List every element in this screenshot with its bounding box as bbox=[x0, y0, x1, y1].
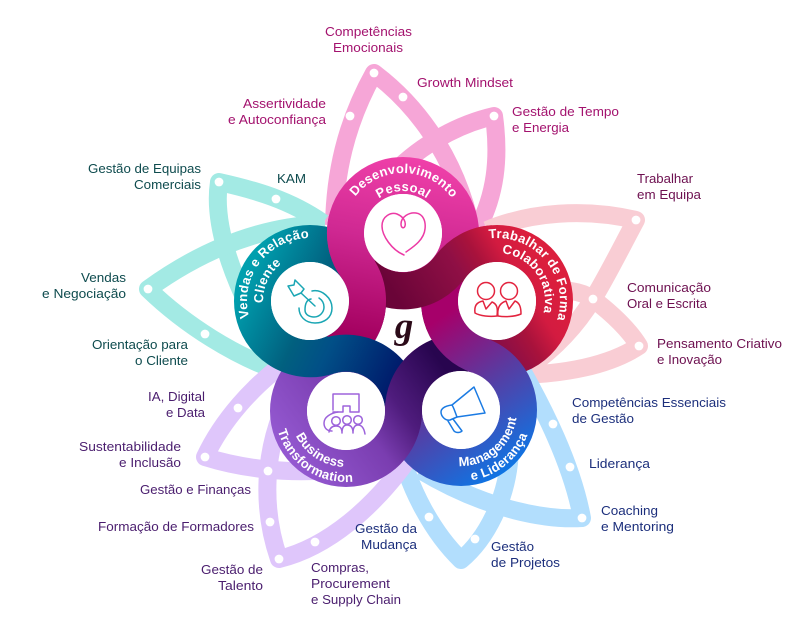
labels: Management e Liderança skills: Liderança bbox=[589, 456, 651, 471]
ring label: Desenvolvimento Pessoal: Desenvolvimento bbox=[349, 164, 456, 196]
labels: Vendas e Relação Cliente skills: o Cliente bbox=[135, 353, 188, 368]
labels: Business Transformation skills: IA, Digital bbox=[148, 389, 205, 404]
labels: Management e Liderança skills: Gestão bbox=[491, 539, 534, 554]
labels: Trabalhar de Forma Colaborativa skills: e Inovação bbox=[657, 352, 722, 367]
ring label: Management e Liderança: Management bbox=[459, 416, 516, 466]
icon: presentation group bbox=[324, 394, 365, 434]
labels: Trabalhar de Forma Colaborativa skills: Trabalhar bbox=[637, 171, 694, 186]
labels: Management e Liderança skills: Gestão da bbox=[355, 521, 418, 536]
labels: Desenvolvimento Pessoal skills: Growth Mindset bbox=[417, 75, 513, 90]
labels: Vendas e Relação Cliente skills: Vendas bbox=[81, 270, 127, 285]
labels: Business Transformation skills bbox=[79, 389, 401, 607]
interlocked rings bbox=[252, 176, 554, 468]
labels: Trabalhar de Forma Colaborativa skills: Pensamento Criativo bbox=[657, 336, 782, 351]
ring label: Business Transformation: Business bbox=[296, 432, 344, 467]
logo g: g bbox=[394, 306, 413, 347]
labels: Vendas e Relação Cliente skills: KAM bbox=[277, 171, 306, 186]
labels: Business Transformation skills: e Inclusão bbox=[119, 455, 181, 470]
labels: Trabalhar de Forma Colaborativa skills bbox=[627, 171, 782, 367]
petals: Vendas e Relação Cliente bbox=[148, 182, 325, 378]
ring label: Management e Liderança: e Liderança bbox=[471, 434, 528, 480]
labels: Vendas e Relação Cliente skills: Gestão de Equipas bbox=[88, 161, 202, 176]
labels: Desenvolvimento Pessoal skills: e Energia bbox=[512, 120, 570, 135]
labels: Desenvolvimento Pessoal skills: e Autoconfiança bbox=[228, 112, 327, 127]
labels: Business Transformation skills: e Data bbox=[166, 405, 206, 420]
labels: Vendas e Relação Cliente skills: Comerciais bbox=[134, 177, 202, 192]
labels: Trabalhar de Forma Colaborativa skills: Oral e Escrita bbox=[627, 296, 708, 311]
labels: Vendas e Relação Cliente skills: Orientação para bbox=[92, 337, 189, 352]
labels: Trabalhar de Forma Colaborativa skills: em Equipa bbox=[637, 187, 702, 202]
skill dots bbox=[144, 69, 643, 563]
labels: Business Transformation skills: Compras, bbox=[311, 560, 369, 575]
labels: Desenvolvimento Pessoal skills: Emocionais bbox=[333, 40, 404, 55]
ring label: Business Transformation: Transformation bbox=[278, 428, 352, 482]
ring label: Trabalhar de Forma Colaborativa: Colaborativa bbox=[503, 245, 554, 313]
labels: Vendas e Relação Cliente skills bbox=[42, 161, 306, 368]
ring label: Trabalhar de Forma Colaborativa: Trabalhar de Forma bbox=[488, 228, 567, 320]
icon: target bbox=[288, 280, 332, 323]
labels: Business Transformation skills: Talento bbox=[218, 578, 263, 593]
ring label: Vendas e Relação Cliente: Vendas e Relação bbox=[238, 230, 308, 320]
petals: Business Transformation bbox=[205, 352, 418, 559]
petals: Management e Liderança bbox=[398, 358, 582, 560]
labels: Management e Liderança skills bbox=[355, 395, 727, 570]
labels: Management e Liderança skills: de Projetos bbox=[491, 555, 561, 570]
icon: two people bbox=[475, 282, 521, 317]
labels: Business Transformation skills: e Supply Chain bbox=[311, 592, 401, 607]
labels: Business Transformation skills: Gestão e Finanças bbox=[140, 482, 251, 497]
labels: Management e Liderança skills: de Gestão bbox=[572, 411, 634, 426]
ring label: Vendas e Relação Cliente: Cliente bbox=[254, 260, 280, 302]
labels: Trabalhar de Forma Colaborativa skills: Comunicação bbox=[627, 280, 711, 295]
petals: Trabalhar de Forma Colaborativa bbox=[487, 213, 639, 375]
ring label: Desenvolvimento Pessoal: Pessoal bbox=[375, 184, 431, 198]
labels: Vendas e Relação Cliente skills: e Negociação bbox=[42, 286, 126, 301]
labels: Management e Liderança skills: Mudança bbox=[361, 537, 418, 552]
labels: Management e Liderança skills: Competências Essenciais bbox=[572, 395, 727, 410]
icon: heart bbox=[382, 213, 425, 255]
labels: Business Transformation skills: Formação de Formadores bbox=[98, 519, 255, 534]
labels: Business Transformation skills: Sustentabilidade bbox=[79, 439, 181, 454]
labels: Desenvolvimento Pessoal skills: Gestão de Tempo bbox=[512, 104, 619, 119]
labels: Desenvolvimento Pessoal skills: Assertividade bbox=[243, 96, 326, 111]
labels: Desenvolvimento Pessoal skills: Competências bbox=[325, 24, 413, 39]
petals: Desenvolvimento Pessoal bbox=[334, 73, 496, 232]
labels: Business Transformation skills: Procurement bbox=[311, 576, 390, 591]
labels: Business Transformation skills: Gestão de bbox=[201, 562, 263, 577]
labels: Management e Liderança skills: e Mentoring bbox=[601, 519, 674, 534]
icon: megaphone bbox=[441, 387, 485, 432]
labels: Desenvolvimento Pessoal skills bbox=[228, 24, 619, 135]
labels: Management e Liderança skills: Coaching bbox=[601, 503, 658, 518]
